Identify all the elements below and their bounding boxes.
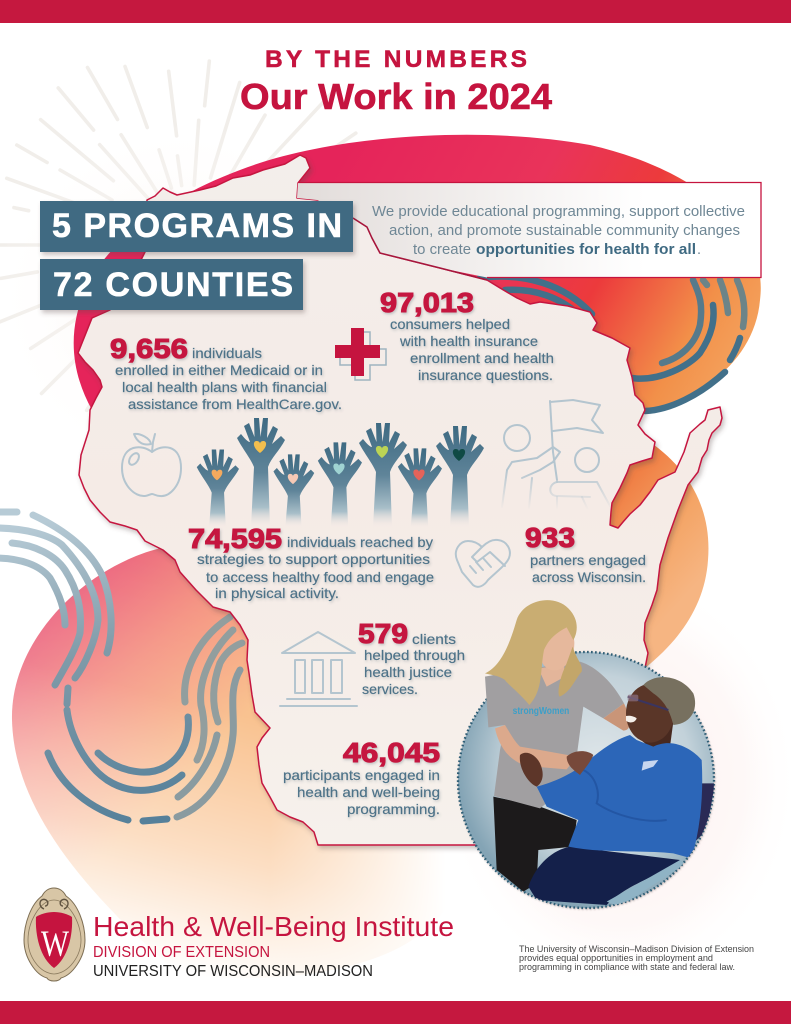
stat: 97,013 consumers (380, 287, 554, 383)
bottom bar (0, 1001, 791, 1024)
callout: mission statement: We provide educational programming, support collective (372, 204, 745, 220)
stat: 9,656 individuals: individuals (192, 345, 262, 361)
gradient blob: top red to orange (74, 135, 761, 412)
heading: 72 counties: 72 COUNTIES (53, 266, 293, 304)
background sunburst rays (0, 61, 356, 410)
stat: 46,045 participants: health and well-being (297, 784, 440, 800)
top bar (0, 0, 791, 23)
gradient blob: lower left pink to cream (12, 547, 460, 978)
stat: 74,595 individuals: individuals reached by (287, 534, 433, 550)
stat: 46,045 participants: 46,045 (343, 737, 440, 768)
icon: medical cross (335, 328, 386, 380)
stat: 46,045 participants: participants engaged in (283, 767, 440, 783)
stat: 579 clients: 579 (358, 618, 408, 649)
stat: 74,595 individuals: strategies to support opportunities (197, 551, 430, 567)
stat: 579 clients: clients (412, 631, 456, 647)
logo: university crest: W (41, 924, 69, 965)
icon: raised hands with hearts (197, 418, 484, 527)
stat: 74,595 individuals (188, 523, 434, 601)
stat: 9,656 individuals: assistance from HealthCare.gov. (128, 396, 342, 412)
stat: 74,595 individuals: 74,595 (188, 523, 282, 554)
stat: 579 clients: health justice (364, 664, 452, 680)
stat: 74,595 individuals: to access healthy food and engage (206, 569, 434, 585)
stat: 97,013 consumers: with health insurance (399, 333, 538, 349)
heading: 5 programs in (40, 201, 353, 252)
title: BY THE NUMBERS (265, 46, 527, 73)
icon: handshake (456, 540, 510, 587)
stat: 97,013 consumers: insurance questions. (418, 367, 553, 383)
equal opportunity statement: provides equal opportunities in employment and (519, 953, 713, 963)
equal opportunity statement: programming in compliance with state and federal law. (519, 962, 735, 972)
institute name: Health & Well-Being Institute (93, 911, 454, 942)
stat: 97,013 consumers: consumers helped (390, 316, 510, 332)
logo: university crest (24, 888, 85, 981)
stat: 9,656 individuals: local health plans with financial (122, 379, 327, 395)
stat: 74,595 individuals: in physical activity. (215, 585, 339, 601)
stat: 97,013 consumers: 97,013 (380, 287, 474, 318)
callout: mission statement: opportunities for health for all (476, 242, 696, 258)
equal opportunity statement: The University of Wisconsin–Madison Division of Extension (519, 944, 754, 954)
title: Our Work in 2024 (240, 76, 552, 117)
title (240, 46, 552, 117)
photo: two women smiling in circular frame: strongWomen (513, 706, 569, 717)
callout: mission statement (297, 182, 761, 280)
heading: 5 programs in: 5 PROGRAMS IN (52, 207, 342, 245)
stat: 933 partners: 933 (525, 522, 575, 553)
callout: mission statement: action, and promote sustainable community changes (389, 223, 740, 239)
equal opportunity statement (519, 944, 754, 972)
icon: courthouse (280, 632, 357, 706)
callout: mission statement: . (697, 242, 701, 258)
stat: 579 clients: services. (362, 681, 418, 697)
decorative arcs: top right (480, 277, 744, 411)
icon: people with flag (502, 400, 610, 510)
map of Wisconsin (78, 155, 722, 845)
stat: 46,045 participants: programming. (347, 801, 440, 817)
institute name: UNIVERSITY OF WISCONSIN–MADISON (93, 963, 373, 980)
stat: 933 partners: partners engaged (530, 552, 646, 568)
photo: two women smiling in circular frame (458, 600, 715, 908)
callout: mission statement: to create (413, 242, 471, 258)
institute name (93, 911, 454, 980)
stat: 579 clients (358, 618, 465, 697)
stat: 9,656 individuals (110, 333, 342, 412)
stat: 46,045 participants (283, 737, 440, 817)
stat: 97,013 consumers: enrollment and health (410, 350, 554, 366)
heading: 72 counties (40, 259, 303, 310)
stat: 579 clients: helped through (364, 647, 465, 663)
stat: 933 partners (525, 522, 646, 585)
gradient blob: right orange (560, 442, 708, 668)
icon: apple (122, 434, 181, 496)
stat: 9,656 individuals: 9,656 (110, 333, 188, 364)
stat: 933 partners: across Wisconsin. (532, 569, 646, 585)
decorative arcs: lower left (0, 512, 242, 821)
stat: 9,656 individuals: enrolled in either Medicaid or in (115, 362, 323, 378)
institute name: DIVISION OF EXTENSION (93, 944, 270, 961)
